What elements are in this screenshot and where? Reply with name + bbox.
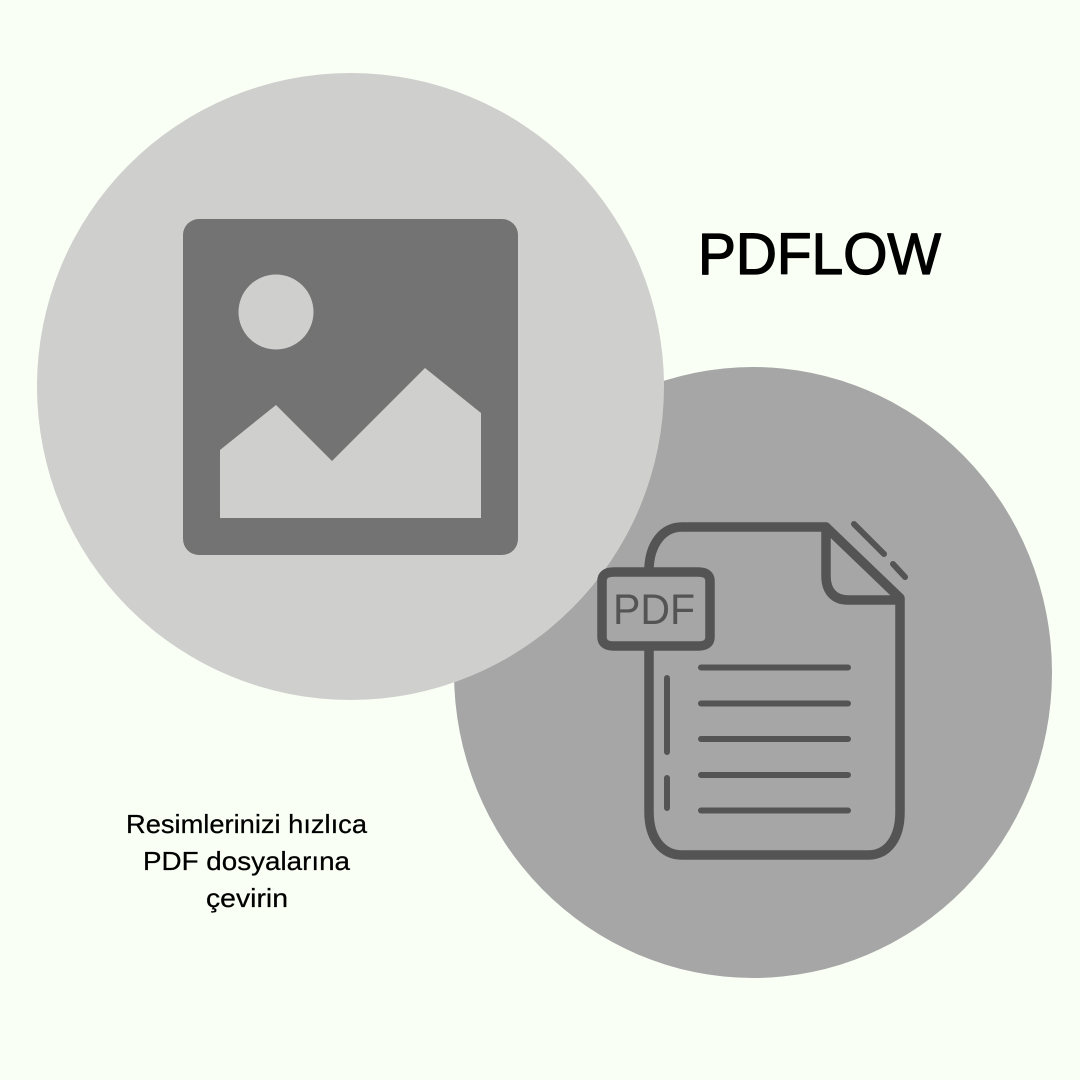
title: PDFLOW (698, 222, 941, 287)
tagline text block (126, 809, 368, 913)
document outline (649, 527, 900, 855)
icon: PDF document (602, 524, 905, 855)
document text lines (701, 668, 848, 810)
panel: light grey circle (37, 73, 664, 700)
tagline line 3: çevirin (206, 883, 288, 913)
panel: dark grey circle (454, 367, 1052, 978)
corner accent lines (854, 524, 905, 577)
icon: image picture (183, 219, 518, 555)
image frame (183, 219, 518, 555)
tagline line 1: Resimlerinizi hızlıca (126, 809, 368, 839)
PDF badge (602, 572, 710, 646)
folded corner (826, 527, 900, 600)
document margin lines (664, 678, 670, 808)
PDF badge label: PDF (613, 586, 695, 634)
image sun (238, 274, 314, 350)
image mountains (220, 368, 481, 518)
tagline line 2: PDF dosyalarına (143, 846, 351, 876)
